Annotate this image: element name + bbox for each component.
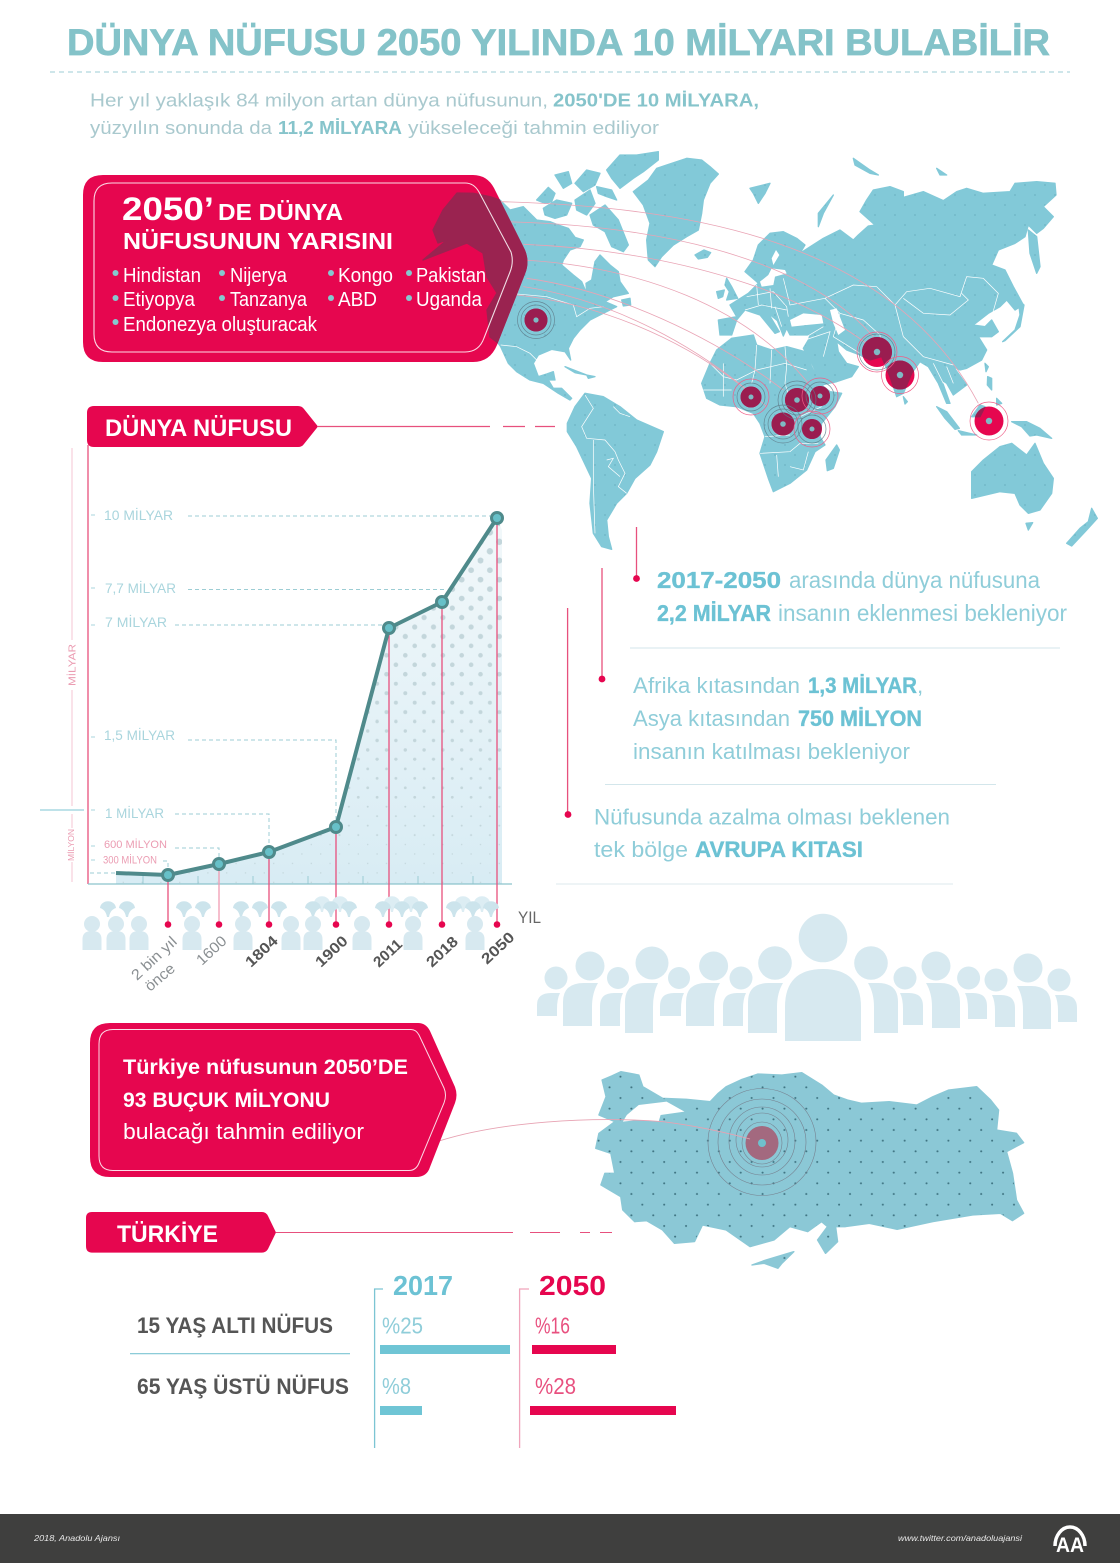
country list (112, 265, 486, 336)
subtitle: Her yıl yaklaşık 84 milyon artan dünya nüfusunun, (90, 90, 548, 110)
text block: 2017-2050: 2017-2050 (657, 567, 781, 593)
text block: 2017-2050: 2,2 MİLYAR (657, 600, 771, 626)
year labels: YIL (518, 908, 541, 927)
column headings: 2050 (539, 1270, 606, 1301)
panel heading (122, 191, 393, 254)
year labels (128, 908, 541, 995)
column headings (375, 1270, 606, 1448)
y axis labels: 10 MİLYAR (104, 506, 173, 523)
footer: 2018, Anadolu Ajansı (33, 1533, 120, 1543)
year labels: 1900 (312, 933, 352, 971)
values 15 yaş altı: %16 (535, 1312, 570, 1338)
y axis labels: 7 MİLYAR (105, 613, 167, 630)
text block: Avrupa: AVRUPA KITASI (695, 837, 863, 862)
heading: Dünya Nüfusu: DÜNYA NÜFUSU (105, 415, 292, 442)
panel: 2050 half of world population (83, 175, 528, 362)
title: DÜNYA NÜFUSU 2050 YILINDA 10 MİLYARI BULABİLİR (67, 22, 1050, 63)
heading: Dünya Nüfusu (87, 406, 555, 447)
year drop lines (165, 518, 500, 928)
panel heading: NÜFUSUNUN YARISINI (123, 228, 393, 254)
heading: Türkiye: TÜRKİYE (117, 1221, 218, 1248)
side scale: MİLYAR (66, 644, 78, 686)
year labels: 2 bin yıl (128, 933, 181, 984)
chart area (110, 510, 510, 884)
dashed guides (90, 516, 490, 875)
text block: 2017-2050: arasında dünya nüfusuna (789, 567, 1040, 593)
y axis labels: 1 MİLYAR (105, 804, 164, 821)
country list: Pakistan (416, 265, 486, 287)
country list: ABD (338, 289, 377, 311)
year labels: 1804 (242, 932, 282, 971)
logo: AA (1056, 1534, 1084, 1557)
world map (423, 152, 1097, 549)
text block: Avrupa: tek bölge (594, 837, 688, 862)
heading: Türkiye (86, 1212, 612, 1253)
country borders (501, 277, 998, 533)
subtitle (90, 90, 759, 138)
row labels: 15 YAŞ ALTI NÜFUS (137, 1313, 333, 1338)
panel: Türkiye 2050: Türkiye nüfusunun 2050’DE (123, 1055, 408, 1079)
subtitle: 11,2 MİLYARA (278, 118, 402, 138)
map: Turkey (596, 1072, 1024, 1268)
footer (0, 1514, 1120, 1563)
text block: Afrika Asya: 1,3 MİLYAR (808, 673, 917, 698)
panel: Türkiye 2050: 93 BUÇUK MİLYONU (123, 1088, 330, 1112)
country list: Uganda (416, 289, 483, 311)
text block: Afrika Asya: Asya kıtasından (633, 706, 790, 731)
y axis labels (103, 506, 176, 866)
panel heading: 2050’ (122, 191, 214, 227)
y axis labels: 300 MİLYON (103, 854, 157, 866)
map markers (517, 301, 1008, 448)
text block: Avrupa (565, 608, 950, 862)
country list: Hindistan (123, 265, 201, 287)
values 15 yaş altı: %25 (382, 1312, 423, 1338)
year labels: 2018 (423, 933, 462, 971)
line chart: world population (40, 445, 512, 928)
axes (88, 445, 512, 884)
text block: Afrika Asya: Afrika kıtasından (633, 673, 800, 698)
subtitle: 2050'DE 10 MİLYARA, (553, 90, 759, 110)
values 65 yaş üstü: %28 (535, 1373, 576, 1399)
values 65 yaş üstü: %8 (382, 1373, 411, 1399)
year labels: 1600 (193, 933, 230, 969)
footer: www.twitter.com/anadoluajansi (898, 1533, 1023, 1543)
text block: Afrika Asya: insanın katılması bekleniyor (633, 739, 911, 764)
text block: 2017-2050 (633, 527, 1067, 626)
text block: 2017-2050: insanın eklenmesi bekleniyor (778, 600, 1067, 626)
panel heading: DE DÜNYA (218, 199, 343, 225)
year labels: 2050 (478, 929, 518, 968)
y axis labels: 1,5 MİLYAR (104, 726, 175, 743)
large crowd (537, 914, 1077, 1041)
row labels (130, 1313, 350, 1399)
data points (162, 512, 502, 880)
panel: Türkiye 2050: bulacağı tahmin ediliyor (123, 1119, 364, 1144)
column headings: 2017 (393, 1270, 453, 1301)
y axis labels: 7,7 MİLYAR (105, 579, 176, 596)
table: age groups (130, 1270, 676, 1448)
panel: Türkiye 2050 (90, 1023, 456, 1177)
subtitle: yüzyılın sonunda da (90, 118, 273, 138)
small crowd under chart (82, 896, 499, 950)
side scale (40, 448, 84, 882)
data line (116, 518, 497, 875)
country list: Etiyopya (123, 289, 196, 311)
connector arcs (500, 202, 978, 407)
country list: Endonezya oluşturacak (123, 314, 318, 336)
Turkey marker rings (440, 1088, 816, 1196)
side scale: MİLYON (66, 829, 76, 861)
row labels: 65 YAŞ ÜSTÜ NÜFUS (137, 1374, 349, 1399)
values 15 yaş altı (380, 1312, 616, 1354)
year labels: 2011 (370, 936, 406, 971)
y axis labels: 600 MİLYON (104, 838, 167, 851)
text block: Afrika Asya: 750 MİLYON (798, 706, 922, 731)
country list: Nijerya (230, 265, 288, 287)
year labels: önce (142, 960, 179, 995)
text block: Avrupa: Nüfusunda azalma olması beklenen (594, 804, 950, 830)
subtitle: yükseleceği tahmin ediliyor (408, 118, 659, 138)
text block: Afrika Asya (599, 568, 923, 764)
country list: Kongo (338, 265, 393, 287)
country list: Tanzanya (230, 289, 308, 311)
text block: Afrika Asya: , (917, 673, 923, 698)
values 65 yaş üstü (380, 1373, 676, 1415)
